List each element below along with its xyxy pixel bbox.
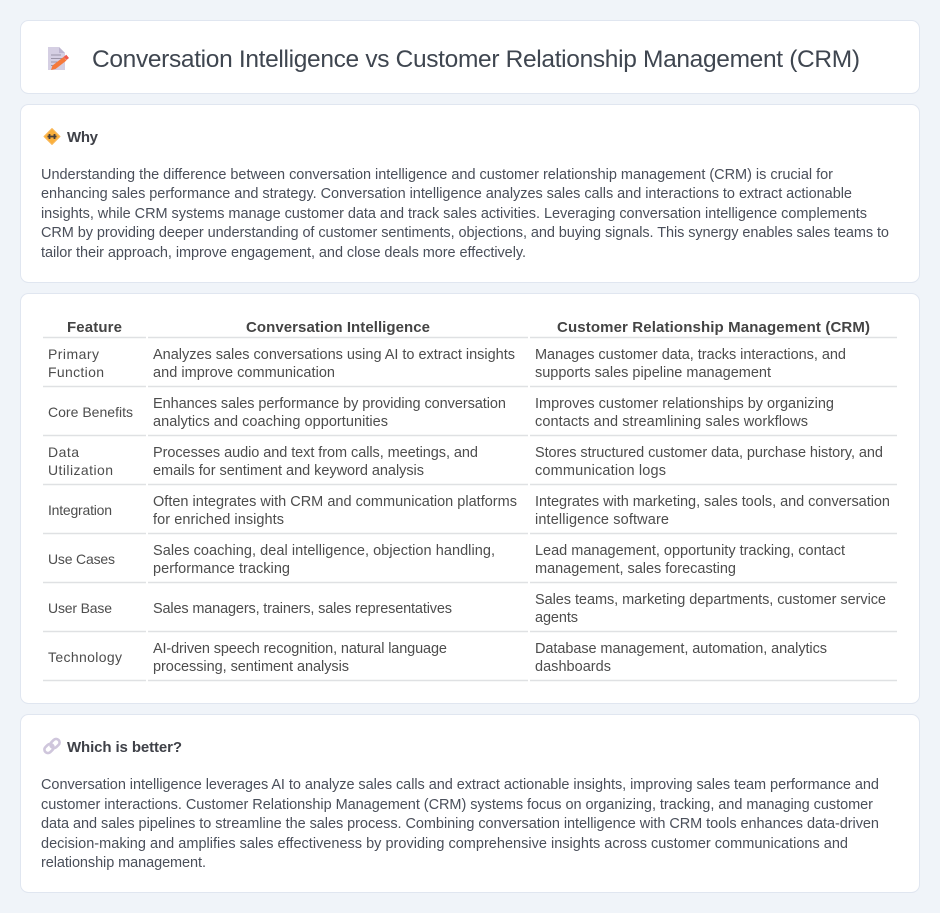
row: primary function: Manages customer data, tracks interactions, and [535, 347, 846, 363]
row: data utilization: emails for sentiment and keyword analysis [153, 463, 424, 479]
icon: link [43, 737, 61, 755]
row: primary function: supports sales pipeline management [535, 365, 771, 381]
table header: Feature [67, 319, 122, 336]
panel: title [20, 20, 920, 94]
table header: Conversation Intelligence [246, 319, 430, 336]
panel: why [20, 104, 920, 282]
row: primary function: and improve communication [153, 365, 335, 381]
row: user base [48, 592, 886, 626]
row: core benefits: contacts and streamlining sales workflows [535, 414, 808, 430]
row: technology: processing, sentiment analysis [153, 659, 349, 675]
row: technology: Database management, automation, analytics [535, 641, 827, 657]
text block: why: Understanding the difference between conversation intelligence and customer relationship management (CRM) is crucial for [41, 167, 833, 183]
row: technology [48, 641, 827, 675]
row: technology: Technology [48, 649, 122, 665]
row: user base: agents [535, 610, 578, 626]
row: data utilization [48, 444, 883, 479]
row: integration: for enriched insights [153, 512, 284, 528]
row: use cases: performance tracking [153, 561, 290, 577]
text block: why: tailor their approach, improve engagement, and close deals more effectively. [41, 245, 526, 261]
text block: which is better: relationship management. [41, 855, 206, 871]
row: primary function: Analyzes sales conversations using AI to extract insights [153, 347, 515, 363]
text block: which is better [41, 777, 879, 871]
row: use cases [48, 543, 845, 577]
row: core benefits: Improves customer relationships by organizing [535, 396, 834, 412]
row: core benefits: Enhances sales performance by providing conversation [153, 396, 506, 412]
row: integration: Integrates with marketing, sales tools, and conversation [535, 494, 890, 510]
row: user base: User Base [48, 600, 112, 616]
icon: warning diamond [44, 128, 60, 144]
row: core benefits: Core Benefits [48, 404, 133, 420]
text block: which is better: Conversation intelligence leverages AI to analyze sales calls and extract actionable insights, improving sales team performance and [41, 777, 879, 793]
row: data utilization: Processes audio and text from calls, meetings, and [153, 445, 478, 461]
row: data utilization: Data [48, 444, 79, 460]
table header [67, 319, 870, 336]
row: user base: Sales managers, trainers, sales representatives [153, 601, 452, 617]
icon: memo [48, 47, 69, 70]
row: use cases: Lead management, opportunity tracking, contact [535, 543, 845, 559]
row: technology: AI-driven speech recognition, natural language [153, 641, 447, 657]
row: core benefits: analytics and coaching opportunities [153, 414, 388, 430]
text block: why: CRM by providing deeper understanding of customer sentiments, objections, and buying signals. This synergy enables sales teams to [41, 225, 889, 241]
row: integration: Often integrates with CRM and communication platforms [153, 494, 517, 510]
panel: comparison table [20, 294, 920, 704]
row: integration: intelligence software [535, 512, 669, 528]
text block: why: insights, while CRM systems manage customer data and track sales activities. Leveraging conversation intelligence complements [41, 206, 867, 222]
row: integration: Integration [48, 502, 112, 518]
text block: which is better: customer interactions. Customer Relationship Management (CRM) systems focus on organizing, tracking, and managing customer [41, 797, 873, 813]
row: data utilization: Utilization [48, 462, 113, 478]
row: primary function [48, 346, 846, 381]
table header: Customer Relationship Management (CRM) [557, 319, 870, 336]
text block: which is better: data and sales pipelines to streamline the sales process. Combining conversation intelligence with CRM tools enhances data-driven [41, 816, 879, 832]
row: primary function: Primary [48, 346, 99, 362]
text block: why [41, 167, 889, 261]
row: use cases: management, sales forecasting [535, 561, 736, 577]
row: technology: dashboards [535, 659, 611, 675]
heading: which is better: Which is better? [67, 739, 182, 756]
row: integration [48, 494, 890, 528]
row: core benefits [48, 396, 834, 430]
text block: which is better: decision-making and amplifies sales effectiveness by providing comprehensive insights across customer communications and [41, 836, 848, 852]
panel: which is better [20, 714, 920, 892]
row: data utilization: Stores structured customer data, purchase history, and [535, 445, 883, 461]
row: use cases: Sales coaching, deal intelligence, objection handling, [153, 543, 495, 559]
row: use cases: Use Cases [48, 551, 115, 567]
row: primary function: Function [48, 364, 104, 380]
title text: Conversation Intelligence vs Customer Relationship Management (CRM) [92, 46, 860, 73]
heading: why: Why [67, 129, 99, 146]
row: user base: Sales teams, marketing departments, customer service [535, 592, 886, 608]
row: data utilization: communication logs [535, 463, 666, 479]
text block: why: enhancing sales performance and strategy. Conversation intelligence analyzes sales calls and interactions to extract actionable [41, 186, 852, 202]
